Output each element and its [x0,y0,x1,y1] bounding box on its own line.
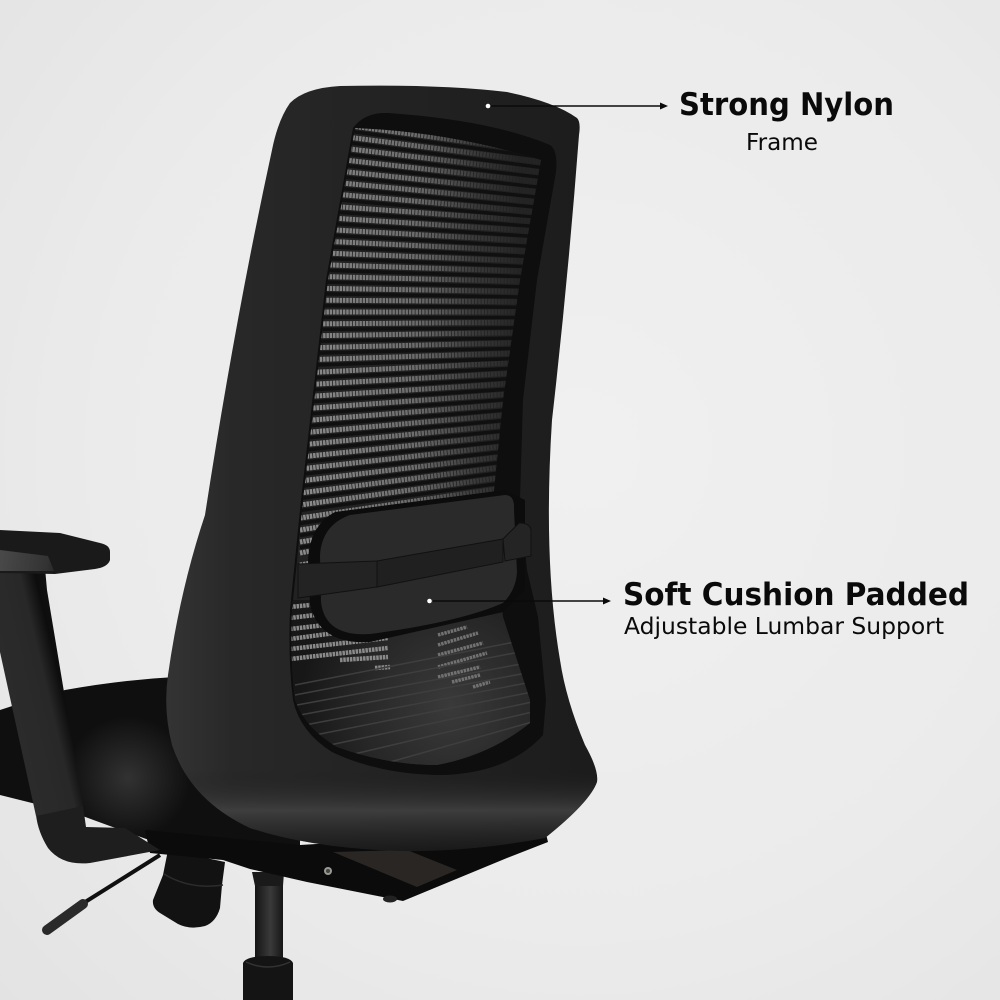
armrest pad [0,530,110,574]
tension knob [153,850,225,928]
frame recess [289,113,556,775]
mesh back panel [291,128,541,765]
lumbar cushion [320,495,517,634]
gas lift post [243,872,293,1000]
mesh stripes lower left [290,605,390,668]
seat mechanism [145,830,548,902]
arm bracket [36,806,160,863]
callout: soft cushion padded lumbar [427,577,969,640]
tilt lever [47,855,160,930]
mesh stripes lower right [438,627,490,687]
lumbar support [298,490,531,642]
mesh gap lines [300,112,550,548]
callout: strong nylon frame: Frame [746,130,818,156]
callout: strong nylon frame: Strong Nylon [679,87,894,123]
chair back frame [166,86,597,851]
lower mesh [292,600,530,765]
lower mesh texture [295,640,532,762]
callout: soft cushion padded lumbar: Adjustable Lumbar Support [624,614,944,640]
arm post [0,568,83,816]
callout: soft cushion padded lumbar: Soft Cushion Padded [623,577,969,613]
callout: strong nylon frame [486,87,894,156]
mesh stripes upper [300,128,530,564]
seat cushion [0,677,300,862]
lumbar clip [503,523,531,561]
lumbar strap [377,539,503,587]
